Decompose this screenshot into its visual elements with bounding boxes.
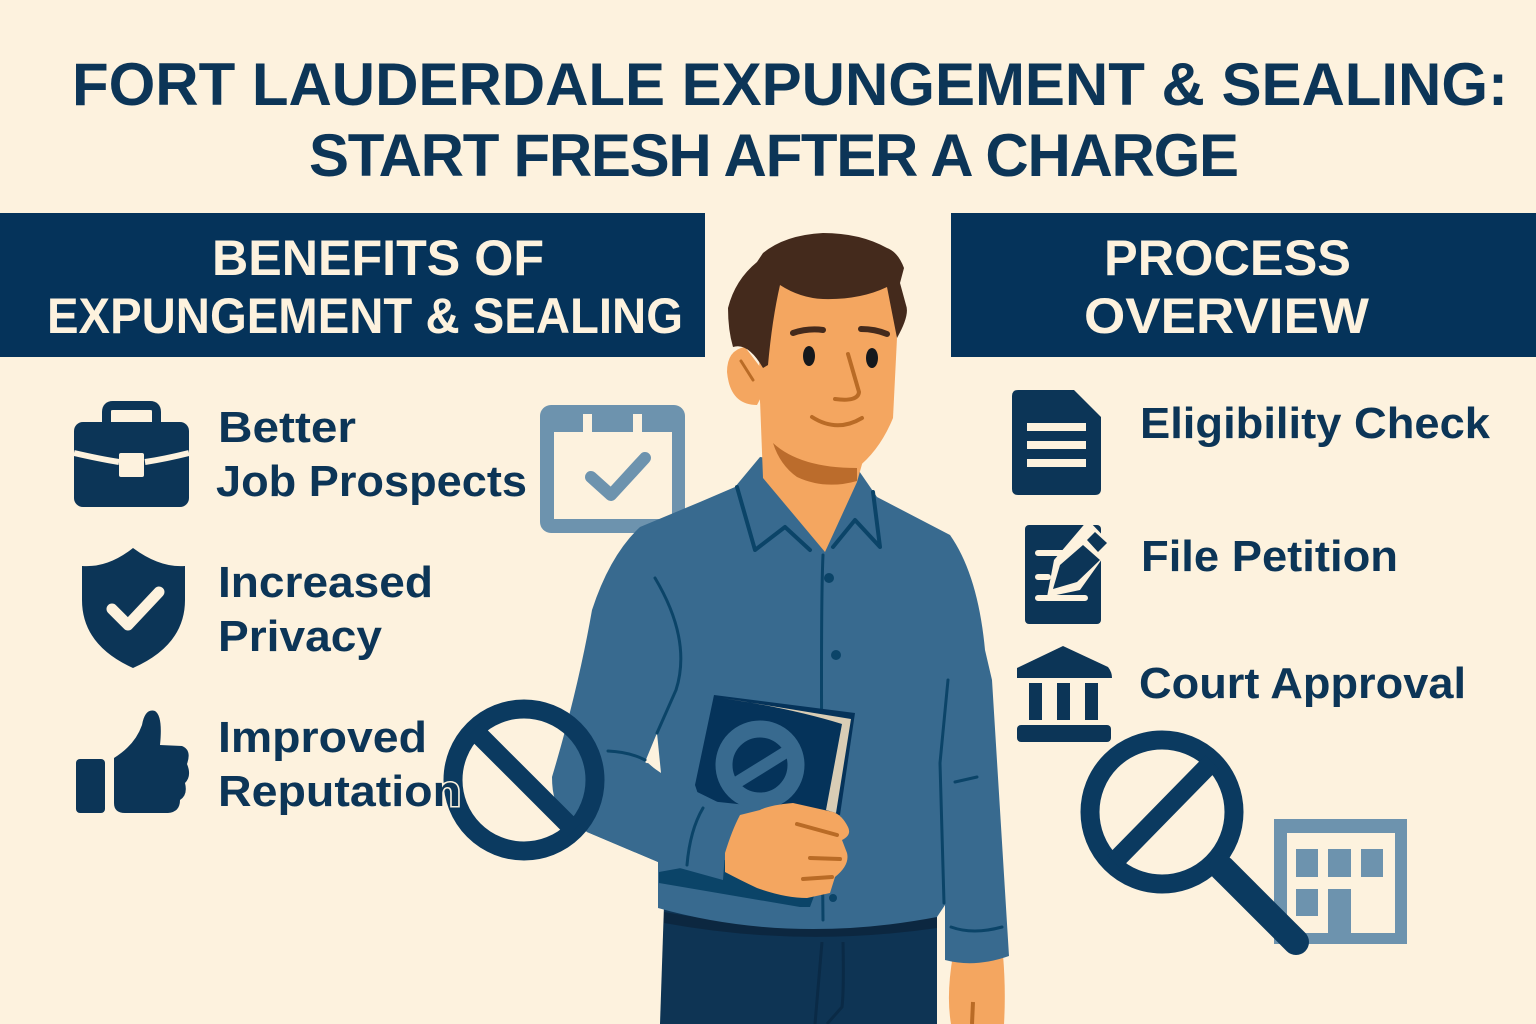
belt shadow	[664, 912, 937, 937]
right hand	[949, 955, 1005, 1024]
neck	[760, 400, 880, 552]
icon: magnifying glass with prohibition sign	[1090, 740, 1296, 942]
gap between arm and body	[645, 733, 661, 773]
title	[72, 51, 1508, 189]
step: file petition: File Petition	[1141, 532, 1398, 581]
step: eligibility check: Eligibility Check	[1140, 399, 1491, 448]
icon: thumbs up	[76, 711, 189, 813]
icon: form and pencil	[1025, 520, 1112, 624]
icon: document	[1012, 390, 1101, 495]
panel header: process: PROCESS	[1104, 230, 1351, 286]
benefit: privacy: Privacy	[218, 612, 383, 661]
trousers	[660, 905, 937, 1024]
step: eligibility check	[1012, 390, 1491, 495]
nose and mouth	[835, 354, 859, 400]
step: file petition	[1025, 520, 1398, 624]
book shadow band	[659, 860, 820, 907]
benefit: job prospects: Job Prospects	[216, 457, 527, 506]
icon: shield	[82, 548, 185, 668]
ear	[727, 347, 770, 405]
step: court approval: Court Approval	[1139, 659, 1466, 708]
benefit: reputation: Reputation	[218, 767, 461, 816]
icon: courthouse	[1017, 646, 1112, 742]
benefit: job prospects	[74, 403, 527, 507]
book	[695, 695, 855, 815]
brows	[793, 329, 887, 334]
title: START FRESH AFTER A CHARGE	[309, 122, 1239, 189]
panel header: process: OVERVIEW	[1084, 288, 1370, 344]
hand	[725, 803, 849, 898]
illustration: man	[552, 233, 1009, 1024]
benefit: job prospects: Better	[218, 403, 356, 452]
panel header: benefits: EXPUNGEMENT & SEALING	[47, 288, 683, 344]
icon: prohibition sign	[453, 709, 595, 851]
benefit: privacy: Increased	[218, 558, 433, 607]
benefit: reputation: Improved	[218, 713, 427, 762]
icon: calendar	[540, 405, 685, 533]
benefit: reputation	[76, 711, 461, 816]
icon: briefcase	[74, 406, 189, 507]
chin shadow	[773, 443, 857, 485]
icon: building	[1274, 819, 1407, 944]
eyes	[803, 346, 815, 366]
head	[758, 270, 897, 470]
panel header: process	[951, 213, 1536, 357]
collar lines	[737, 487, 880, 550]
panel header: benefits	[0, 213, 705, 357]
hair	[728, 233, 907, 368]
left sleeve cuff	[587, 763, 740, 880]
title: FORT LAUDERDALE EXPUNGEMENT & SEALING:	[72, 51, 1508, 118]
step: court approval	[1017, 646, 1466, 742]
shirt details	[608, 555, 1002, 931]
panel header: benefits: BENEFITS OF	[212, 230, 544, 286]
shirt	[552, 457, 1009, 963]
benefit: privacy	[82, 548, 433, 668]
